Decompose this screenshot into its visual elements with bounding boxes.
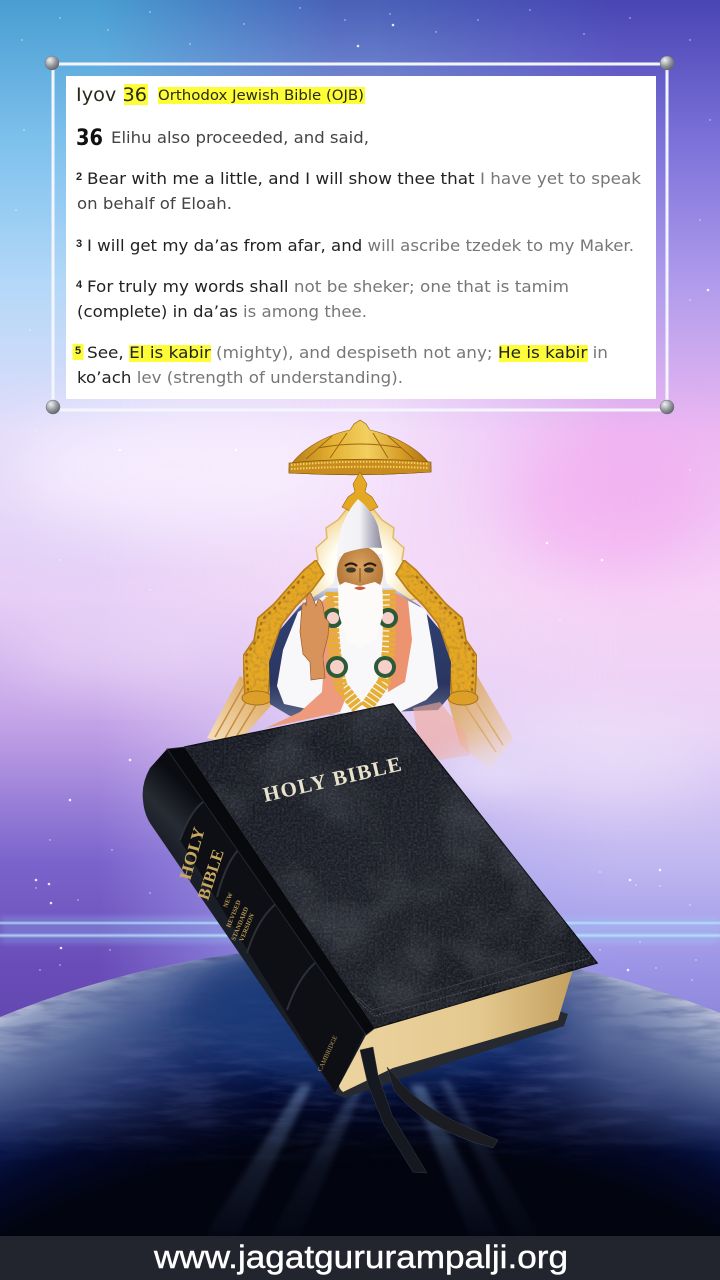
spine title xyxy=(176,825,228,902)
spine edition text: STANDARD xyxy=(230,906,250,942)
figure: Kabir Saheb on golden throne xyxy=(207,420,513,770)
verse 2: on behalf of Eloah. xyxy=(77,194,232,213)
verse 2 xyxy=(76,169,642,213)
verse 1: Elihu also proceeded, and said, xyxy=(111,128,369,147)
spine edition text xyxy=(222,891,256,943)
heading: version: Orthodox Jewish Bible (OJB) xyxy=(158,88,364,104)
corner rivets xyxy=(45,56,674,414)
footer URL: www.jagatgururampalji.org xyxy=(153,1239,568,1275)
spine edition text: REVISED xyxy=(225,899,243,929)
cover title: HOLY BIBLE xyxy=(261,752,404,807)
verse 5 xyxy=(75,343,608,387)
raised hand xyxy=(300,593,329,680)
verse 4: (complete) in da’as is among thee. xyxy=(77,302,367,321)
page block xyxy=(338,966,574,1092)
footer bar xyxy=(0,1236,720,1280)
throne arch: gold band xyxy=(243,560,477,704)
spine edition text: NEW xyxy=(222,891,235,909)
spine xyxy=(143,749,373,1093)
tall white cap xyxy=(337,499,382,556)
white text panel xyxy=(66,76,656,399)
planet xyxy=(0,930,720,1240)
verse 2: 2 xyxy=(76,171,82,183)
mouth xyxy=(354,586,366,590)
front cover xyxy=(185,704,597,1028)
white hair xyxy=(328,554,392,588)
spine title: BIBLE xyxy=(194,847,228,902)
spine edition text: VERSION xyxy=(238,912,256,943)
frame lines xyxy=(53,64,667,410)
cover leather texture xyxy=(185,704,596,1028)
verse 3: I will get my da’as from afar, and will ascribe tzedek to my Maker. xyxy=(87,236,634,255)
verse 4: For truly my words shall not be sheker; one that is tamim xyxy=(87,277,569,296)
throne pillars xyxy=(207,670,513,770)
halo behind head xyxy=(296,510,424,616)
framed scripture panel xyxy=(45,56,674,414)
head xyxy=(337,546,383,598)
chapter number: 36 xyxy=(76,126,103,151)
throne capitals xyxy=(242,691,478,705)
throne niche xyxy=(269,586,451,716)
garland xyxy=(325,590,396,708)
throne arch: outer beading xyxy=(246,573,474,690)
bookmark ribbon short xyxy=(387,1067,498,1148)
cover hinge xyxy=(167,747,375,1035)
verse 4: 4 xyxy=(76,279,83,291)
orange shawl left xyxy=(266,592,345,728)
background: stars xyxy=(16,8,710,980)
icon: golden canopy xyxy=(289,420,431,475)
light rays xyxy=(218,1078,512,1226)
Holy Bible book xyxy=(130,690,610,1173)
verse 5: ko’ach lev (strength of understanding). xyxy=(77,368,403,387)
horizon light band xyxy=(0,916,720,944)
verse 5: See, El is kabir (mighty), and despiseth not any; He is kabir in xyxy=(87,343,608,362)
verse 4 xyxy=(76,277,569,321)
background: cosmic sky gradient xyxy=(0,0,720,1017)
heading: Iyov 36: Iyov 36 xyxy=(76,85,147,106)
fading glow over throne base xyxy=(440,752,540,792)
verse 3: 3 xyxy=(76,238,82,250)
spine title: HOLY xyxy=(176,825,209,882)
bookmark ribbon long xyxy=(360,1047,427,1173)
skirt xyxy=(413,702,470,760)
verse 2: Bear with me a little, and I will show thee that I have yet to speak xyxy=(87,169,642,188)
robe xyxy=(277,592,438,714)
verse 5: 5 xyxy=(75,345,81,357)
orange shawl right xyxy=(388,590,412,692)
spine publisher: CAMBRIDGE xyxy=(316,1035,339,1073)
beard xyxy=(338,582,383,648)
icon: throne finial xyxy=(342,472,378,512)
spine raised bands xyxy=(180,802,366,1093)
back cover xyxy=(333,1010,568,1098)
yellow highlights xyxy=(72,84,588,362)
